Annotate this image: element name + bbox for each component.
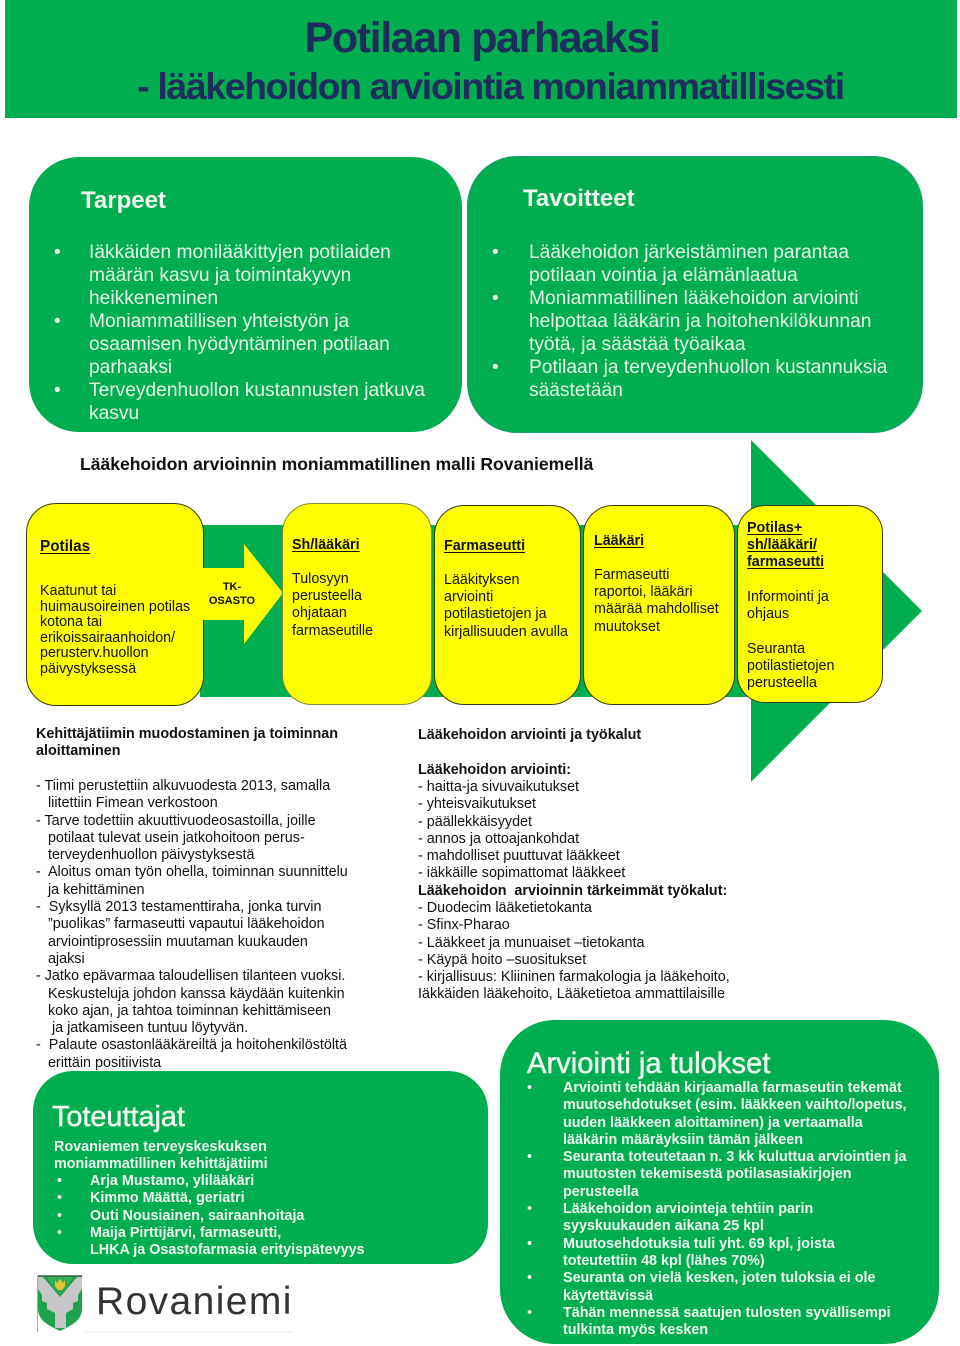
text: Tavoitteet items: Lääkehoidon järkeistäminen parantaa potilaan vointia ja elämänlaatua Moniammatillinen lääkehoidon arviointi helpottaa lääkärin ja hoitohenkilökunnan työtä, ja säästää työaikaa Potilaan ja terveydenhuollon kustannuksia säästetään [529,242,887,401]
panel: Tavoitteet [467,156,923,433]
title [137,14,844,107]
heading: Kehittäjätiimin muodostaminen ja toiminnan aloittaminen [36,726,338,759]
card: Lääkäri [583,505,735,705]
bullet list: Tarpeet: • • • [54,242,61,401]
card text: Kaatunut tai huimausoireinen potilas kotona tai erikoissairaanhoidon/ perusterv.huollon päivystyksessä [40,583,190,676]
bullets: • • • • • • [527,1080,532,1321]
logo: Rovaniemi [37,1275,293,1332]
card text: Lääkityksen arviointi potilastietojen ja kirjallisuuden avulla [444,572,568,640]
list: arviointi: - haitta-ja sivuvaikutukset - yhteisvaikutukset - päällekkäisyydet - annos ja ottoajankohdat - mahdolliset puuttuvat lääkkeet - iäkkäille sopimattomat lääkkeet [418,779,625,881]
panel: Tarpeet [29,157,462,432]
card: Potilas [26,503,204,706]
heading: Tarpeet: Tarpeet [81,187,166,214]
bullets: • • • • [57,1173,62,1241]
card: Sh/lääkäri [282,503,432,705]
card text: Informointi ja ohjaus Seuranta potilastietojen perusteella [747,589,834,691]
results: Arviointi tehdään kirjaamalla farmaseutin tekemät muutosehdotukset (esim. lääkkeen vaihto/lopetus, uuden lääkkeen aloittaminen) ja vertaamalla lääkärin määräyksiin tämän jälkeen Seuranta toteutetaan n. 3 kk kuluttua arviointien ja muutosten tekemisestä potilasasiakirjojen perusteella Lääkehoidon arviointeja tehtiin parin syyskuukauden aikana 25 kpl Muutosehdotuksia tuli yht. 69 kpl, joista toteutettiin 48 kpl (lähes 70%) Seuranta on vielä kesken, joten tuloksia ei ole käytettävissä Tähän mennessä saatujen tulosten syvällisempi tulkinta myös kesken [563,1080,907,1338]
header band [5,0,957,118]
card heading: Farmaseutti [444,538,525,554]
arrow: TK-osasto [203,544,282,644]
heading: model: Lääkehoidon arvioinnin moniammatillinen malli Rovaniemellä [80,454,593,474]
body: - Tiimi perustettiin alkuvuodesta 2013, samalla liitettiin Fimean verkostoon - Tarve todettiin akuuttivuodeosastoilla, joille potilaat tulevat usein jatkohoitoon perus- terveydenhuollon päivystyksestä - Aloitus oman työn ohella, toiminnan suunnittelu ja kehittäminen - Syksyllä 2013 testamenttiraha, jonka turvin ”puolikas” farmaseutti vapautui lääkehoidon arviointiprosessiin muutaman kuukauden ajaksi - Jatko epävarmaa taloudellisen tilanteen vuoksi. Keskusteluja johdon kanssa käydään kuitenkin koko ajan, ja tahtoa toiminnan kehittämiseen ja jatkamiseen tuntuu löytyvän. - Palaute osastonlääkäreiltä ja hoitohenkilöstöltä erittäin positiivista [36,778,348,1071]
card: Potilas+ [737,505,883,703]
panel: Toteuttajat [33,1071,488,1264]
title line 2: - lääkehoidon arviointia moniammatillisesti [137,65,844,107]
card text: Tulosyyn perusteella ohjataan farmaseutille [292,571,373,639]
card heading: Sh/lääkäri [292,537,360,553]
logo wordmark: Rovaniemi [96,1280,293,1323]
bullet list: Tavoitteet: • • • [492,242,499,378]
heading: Lääkehoidon arviointi ja työkalut [418,727,641,743]
subheading: Lääkehoidon arvioinnin tärkeimmät työkalut: [418,883,727,899]
card heading: Potilas+ sh/lääkäri/ farmaseutti [747,520,824,570]
card: Farmaseutti [434,505,581,705]
team name: Rovaniemen terveyskeskuksen moniammatillinen kehittäjätiimi [54,1139,268,1172]
title line 1: Potilaan parhaaksi [305,14,659,62]
subheading: Lääkehoidon arviointi: [418,762,571,778]
text: Kehittäjätiimi [36,726,348,1071]
panel: Arviointi ja tulokset [500,1020,939,1344]
text: Tarpeet items: Iäkkäiden monilääkittyjen potilaiden määrän kasvu ja toimintakyvyn heikkeneminen Moniammatillisen yhteistyön ja osaamisen hyödyntäminen potilaan parhaaksi Terveydenhuollon kustannusten jatkuva kasvu [89,242,425,424]
label: TK-osasto: TK- OSASTO [209,581,255,607]
team members: Arja Mustamo, ylilääkäri Kimmo Määttä, geriatri Outi Nousiainen, sairaanhoitaja Maija Pirttijärvi, farmaseutti, LHKA ja Osastofarmasia erityispätevyys [90,1173,365,1258]
card text: Farmaseutti raportoi, lääkäri määrää mahdolliset muutokset [594,567,719,635]
card heading: Lääkäri [594,533,644,549]
heading: Tavoitteet: Tavoitteet [523,185,635,212]
list: työkalut: - Duodecim lääketietokanta - Sfinx-Pharao - Lääkkeet ja munuaiset –tietokanta - Käypä hoito –suositukset - kirjallisuus: Kliininen farmakologia ja lääkehoito, Iäkkäiden lääkehoito, Lääketietoa ammattilaisille [418,900,730,1002]
heading: Arviointi ja tulokset [527,1048,770,1080]
arrow: process background [200,440,922,782]
text: Lääkehoidon arviointi ja työkalut [418,727,730,1002]
heading: Toteuttajat: Toteuttajat [52,1101,185,1133]
icon: coat of arms [37,1275,293,1332]
card heading: Potilas [40,538,90,555]
